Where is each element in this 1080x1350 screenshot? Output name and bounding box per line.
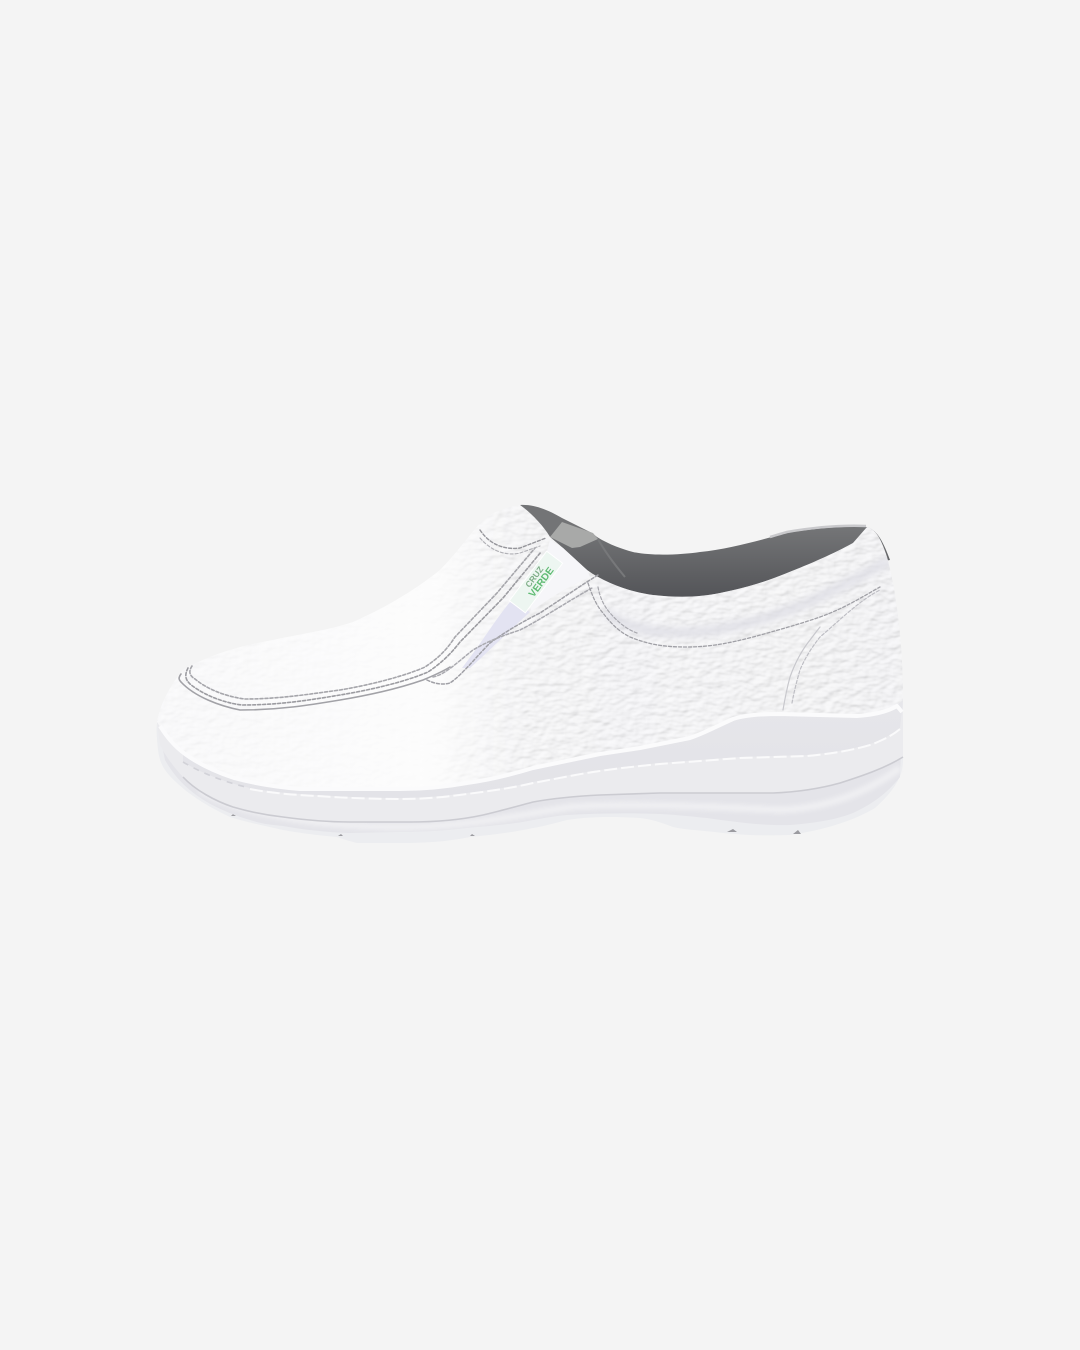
elastic gusset bbox=[462, 540, 590, 668]
heel counter stitch bbox=[783, 627, 820, 710]
collar padding shade bbox=[605, 560, 890, 632]
outsole tread base bbox=[157, 700, 903, 843]
toe moc seam outer edge bbox=[179, 667, 450, 710]
light rim along the heel collar bbox=[770, 526, 866, 537]
outsole band bbox=[157, 700, 903, 833]
lower gusset stitch bbox=[427, 575, 598, 684]
top line stitch bbox=[480, 530, 546, 548]
white ridge above sole bbox=[160, 706, 902, 789]
product illustration: white slip-on shoe bbox=[157, 504, 904, 836]
sole stitching bbox=[250, 729, 900, 799]
tread notches bbox=[231, 814, 801, 836]
quarter curved stitch bbox=[588, 583, 880, 647]
grey patch on lining bbox=[550, 522, 598, 548]
brand tag: Cruz Verde: CRUZ bbox=[523, 564, 545, 589]
leather upper bbox=[150, 495, 910, 795]
toe moc seam stitches bbox=[186, 552, 541, 705]
shoe bbox=[150, 495, 910, 843]
wedge band above stitching bbox=[157, 700, 903, 799]
inner lining: dark collar bbox=[520, 505, 890, 610]
brand tag: Cruz Verde: VERDE bbox=[527, 565, 557, 600]
brand tag: Cruz Verde bbox=[509, 551, 563, 613]
midsole band bbox=[157, 700, 903, 822]
leather grain texture bbox=[162, 505, 903, 778]
stitching lines bbox=[179, 530, 880, 710]
